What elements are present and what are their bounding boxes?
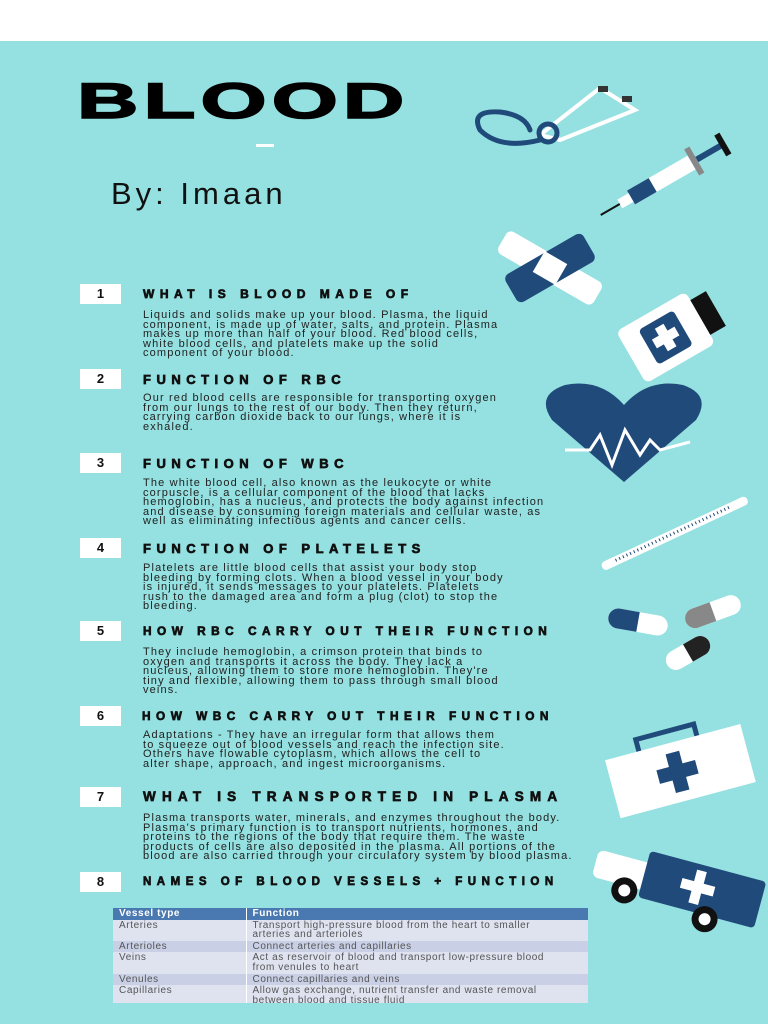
table: vessels: Arteries <box>119 920 158 931</box>
section 2: carrying carbon dioxide back to our lungs, where it is <box>143 411 461 423</box>
section 5: tiny and flexible, allowing them to pass through small blood <box>143 674 499 686</box>
section 1 <box>80 284 498 359</box>
icon: pills <box>607 592 744 674</box>
table: vessels: Capillaries <box>119 985 172 996</box>
section 8: 8 <box>97 874 104 889</box>
section 8: NAMES OF BLOOD VESSELS + FUNCTION <box>143 876 559 888</box>
section 4: Platelets are little blood cells that assist your body stop <box>143 562 477 574</box>
section 7: WHAT IS TRANSPORTED IN PLASMA <box>143 789 563 804</box>
section 4: is injured, it sends messages to your platelets. Platelets <box>143 581 480 593</box>
section 7: proteins to the regions of the body that require them. The waste <box>143 831 526 843</box>
section 7: 7 <box>97 789 104 804</box>
table: vessels: Connect arteries and capillaries <box>252 941 412 952</box>
dash <box>256 144 274 147</box>
table: vessels: from venules to heart <box>252 962 359 973</box>
section 6: alter shape, approach, and ingest microorganisms. <box>143 758 446 770</box>
section 1: Liquids and solids make up your blood. Plasma, the liquid <box>143 309 489 321</box>
section 1: makes up more than half of your blood. Red blood cells, <box>143 328 478 340</box>
section 7: products of cells are also deposited in the plasma. All portions of the <box>143 840 556 852</box>
table: vessels: Connect capillaries and veins <box>252 974 400 985</box>
section 5: nucleus, allowing them to store more hemoglobin. They're <box>143 665 489 677</box>
table: vessels: Venules <box>119 974 159 985</box>
section 1: component, is made up of water, salts, and protein. Plasma <box>143 318 498 330</box>
icon: syringe <box>593 130 733 228</box>
icon: thermometer <box>600 495 749 571</box>
section 5: They include hemoglobin, a crimson protein that binds to <box>143 646 483 658</box>
section 2: 2 <box>97 371 104 386</box>
section 3: well as eliminating infectious agents and cancer cells. <box>143 515 467 527</box>
section 5 <box>80 621 552 696</box>
section 4 <box>80 538 504 612</box>
section 2: from our lungs to the rest of our body. Then they return, <box>143 402 478 414</box>
icon: stethoscope <box>478 86 635 143</box>
section 2: exhaled. <box>143 420 194 432</box>
section 7: blood are also carried through your circulatory system by blood plasma. <box>143 850 573 862</box>
section 5: HOW RBC CARRY OUT THEIR FUNCTION <box>143 624 552 638</box>
section 3 <box>80 453 544 527</box>
section 5: 5 <box>97 623 104 638</box>
section 6: 6 <box>97 708 104 723</box>
section 6: Others have flowable cytoplasm, which allows the cell to <box>143 748 481 760</box>
table: vessels <box>113 908 588 1003</box>
table: vessels: Allow gas exchange, nutrient transfer and waste removal <box>252 985 537 996</box>
section 5: veins. <box>143 684 179 696</box>
icon: pill bottle <box>616 283 731 383</box>
table: vessels: Veins <box>119 952 146 963</box>
section 7 <box>80 787 573 862</box>
section 4: bleeding. <box>143 600 198 612</box>
section 2: Our red blood cells are responsible for transporting oxygen <box>143 392 497 404</box>
section 6 <box>80 706 554 770</box>
section 6: HOW WBC CARRY OUT THEIR FUNCTION <box>142 709 554 723</box>
section 4: bleeding by forming clots. When a blood vessel in your body <box>143 572 504 584</box>
table: vessels: Vessel type <box>119 908 180 919</box>
section 6: Adaptations - They have an irregular form that allows them <box>143 729 495 741</box>
section 3: FUNCTION OF WBC <box>143 456 349 471</box>
section 6: to squeeze out of blood vessels and reach the infection site. <box>143 738 505 750</box>
section 4: rush to the damaged area and form a plug (clot) to stop the <box>143 590 498 602</box>
byline: By: Imaan <box>111 176 287 211</box>
section 7: Plasma's primary function is to transport nutrients, hormones, and <box>143 822 539 834</box>
white top band <box>0 0 768 41</box>
table: vessels: Transport high-pressure blood from the heart to smaller <box>252 920 530 931</box>
section 3: The white blood cell, also known as the leukocyte or white <box>143 477 492 489</box>
section 4: 4 <box>97 540 104 555</box>
section 2: FUNCTION OF RBC <box>143 372 346 387</box>
section 1: 1 <box>97 286 104 301</box>
icon: bandage <box>479 200 621 336</box>
table: vessels: Act as reservoir of blood and transport low-pressure blood <box>252 952 544 963</box>
section 5: oxygen and transports it across the body. They lack a <box>143 656 463 668</box>
section 8 <box>80 872 559 892</box>
title: BLOOD <box>77 73 409 129</box>
section 7: Plasma transports water, minerals, and enzymes throughout the body. <box>143 812 560 824</box>
section 3: hemoglobin, has a nucleus, and protects the body against infection <box>143 496 544 508</box>
icons column <box>475 86 766 932</box>
icon: ambulance <box>585 838 766 945</box>
section 1: WHAT IS BLOOD MADE OF <box>143 287 414 301</box>
section 3: 3 <box>97 455 104 470</box>
icon: first aid kit <box>602 712 756 818</box>
table: vessels: arteries and arterioles <box>252 929 363 940</box>
section 3: and disease by consuming foreign materials and cellular waste, as <box>143 506 541 518</box>
section 2 <box>80 369 497 432</box>
section 4: FUNCTION OF PLATELETS <box>143 541 426 556</box>
section 3: corpuscle, is a cellular component of the blood that lacks <box>143 486 485 498</box>
table: vessels: Arterioles <box>119 941 167 952</box>
section 1: component of your blood. <box>143 347 295 359</box>
section 1: white blood cells, and platelets make up the solid <box>143 338 439 350</box>
icon: heart <box>546 384 702 482</box>
table: vessels: Function <box>252 908 300 919</box>
